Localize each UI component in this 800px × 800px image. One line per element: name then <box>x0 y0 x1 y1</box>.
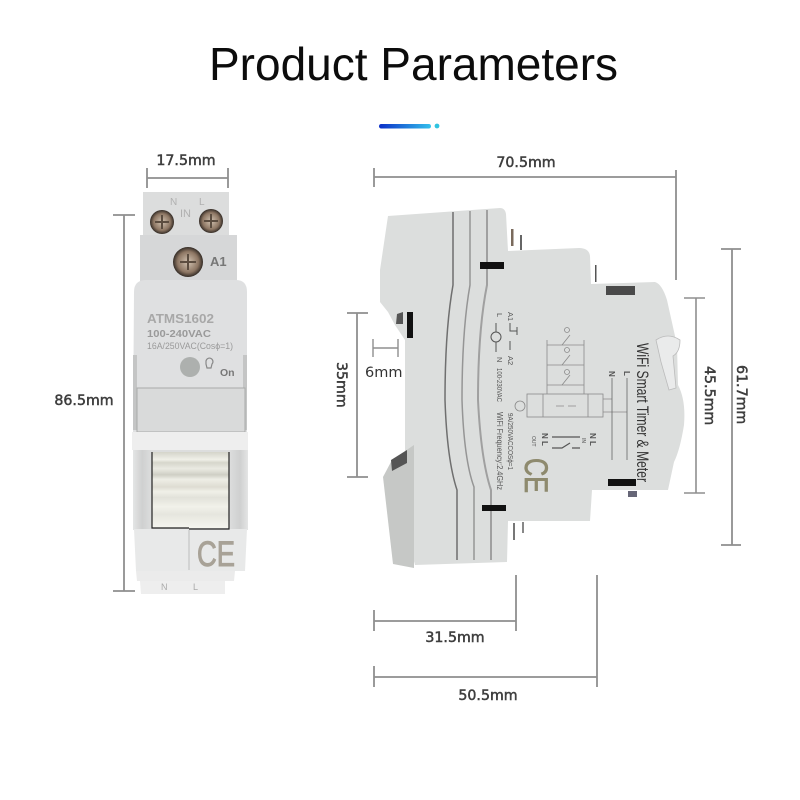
curved seams <box>445 212 457 560</box>
vertical product text: N L <box>588 433 597 446</box>
vertical product text: WiFi Frequency:2.4GHz <box>495 412 504 490</box>
dimension 61.7mm: 61.7mm <box>733 365 749 424</box>
black slots and pins <box>396 229 637 540</box>
main housing: L <box>193 582 198 592</box>
device label: 100-240VAC <box>147 328 211 340</box>
dimension 35mm: 35mm <box>333 362 349 408</box>
vertical product text: OUT <box>530 436 536 447</box>
CE mark front <box>189 530 235 574</box>
top terminal block: L <box>199 197 205 208</box>
A1 terminal block: A1 <box>210 254 227 269</box>
device label: ATMS1602 <box>147 311 214 326</box>
title: Product Parameters <box>209 38 618 90</box>
vertical product text: WiFi Smart Timer & Meter <box>633 343 652 482</box>
dimension 50.5mm: 50.5mm <box>458 688 518 704</box>
dimension 61.7mm <box>721 249 749 545</box>
dimension 45.5mm <box>684 298 717 493</box>
dimension 70.5mm <box>374 155 676 280</box>
dimension 6mm: 6mm <box>365 365 402 381</box>
top terminal block <box>143 192 229 236</box>
ribbed dial <box>152 452 229 529</box>
accent underline <box>379 124 439 128</box>
vertical product text <box>495 312 652 490</box>
main housing <box>132 280 248 594</box>
vertical product text: N <box>495 357 504 362</box>
dimension 6mm <box>365 339 402 381</box>
release clip <box>656 336 680 390</box>
front view device <box>132 192 248 594</box>
load circuit symbol <box>491 323 517 352</box>
dimension 86.5mm: 86.5mm <box>54 393 114 409</box>
vertical product text: 100-230VAC <box>495 368 504 402</box>
lower clip <box>383 445 414 568</box>
vertical product text: L <box>495 313 504 317</box>
dimension 31.5mm <box>374 575 516 646</box>
vertical product text: L <box>622 371 631 376</box>
device label: 16A/250VAC(Cosϕ=1) <box>147 341 233 351</box>
side view device <box>380 208 684 568</box>
vertical product text: IN <box>580 438 586 443</box>
vertical product text: A2 <box>506 356 515 365</box>
top terminal block: IN <box>180 208 191 220</box>
dimension 70.5mm: 70.5mm <box>496 155 556 171</box>
top terminal block: N <box>170 197 177 208</box>
wiring diagram <box>515 328 627 460</box>
A1 terminal block <box>140 235 237 281</box>
side housing <box>380 208 684 565</box>
vertical product text: N <box>607 371 616 377</box>
dimension 45.5mm: 45.5mm <box>701 366 717 425</box>
dimension 31.5mm: 31.5mm <box>425 630 485 646</box>
dimension 17.5mm: 17.5mm <box>156 153 216 169</box>
vertical product text: N L <box>540 433 549 446</box>
dimension 17.5mm <box>147 153 228 188</box>
dimension 86.5mm <box>54 215 135 591</box>
dimension 35mm <box>333 313 368 477</box>
status indicator <box>180 357 235 379</box>
dimension 50.5mm <box>374 575 597 704</box>
CE mark front: CE <box>197 535 235 574</box>
CE mark side: CE <box>518 458 554 493</box>
vertical product text: 9A/250VACCOSϕ=1 <box>506 413 513 470</box>
vertical product text: A1 <box>506 312 515 321</box>
device label <box>147 311 233 351</box>
status indicator: On <box>220 367 235 379</box>
main housing: N <box>161 582 168 592</box>
